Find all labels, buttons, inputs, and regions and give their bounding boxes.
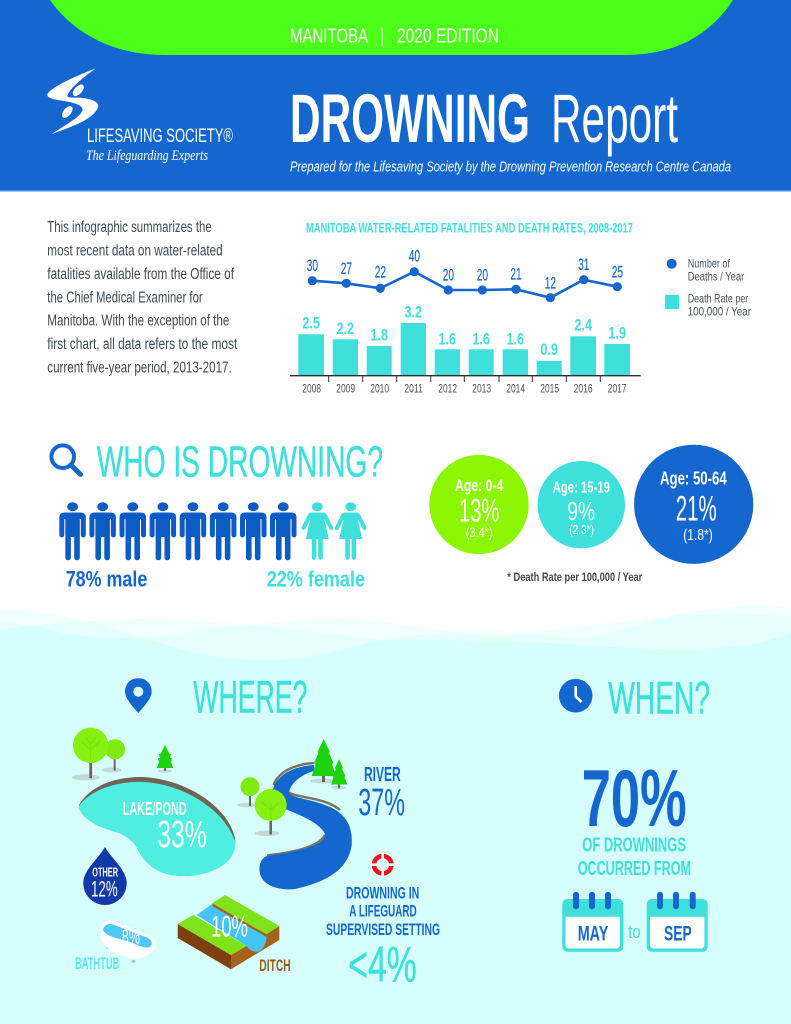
circle: age 0-4: 13% bbox=[459, 493, 499, 529]
caption: OF DROWNINGS bbox=[582, 835, 686, 857]
label: river 37%: RIVER bbox=[364, 764, 401, 786]
stat: 70%: 70% bbox=[582, 754, 687, 844]
bar value labels: 2.4 bbox=[574, 317, 593, 335]
calendar: May: MAY bbox=[578, 922, 608, 946]
circle: age 15-19: 9% bbox=[567, 496, 595, 526]
circle: age 50-64: 21% bbox=[676, 490, 717, 529]
bathtub: 8% bbox=[75, 920, 156, 973]
bar value labels: 2.2 bbox=[336, 320, 354, 338]
lake: 33%: 33% bbox=[157, 814, 207, 856]
background: water waves bbox=[0, 605, 791, 1024]
pictogram: 8 men bbox=[59, 502, 296, 560]
green edition tab bbox=[50, 0, 733, 55]
illustration: trees by the lake bbox=[72, 728, 173, 780]
title: Report bbox=[551, 80, 678, 157]
bar value labels: 1.6 bbox=[472, 330, 490, 348]
panel: header banner bbox=[0, 0, 791, 192]
pictogram: 2 women bbox=[302, 502, 366, 560]
calendar: May bbox=[562, 892, 623, 952]
label: lifeguard supervised setting: A LIFEGUARD bbox=[349, 903, 417, 921]
bar value labels: 1.6 bbox=[438, 330, 456, 348]
bar value labels: 3.2 bbox=[404, 304, 422, 322]
circle: age 15-19: Age: 15-19 bbox=[553, 480, 610, 497]
illustration: trees by the river bbox=[237, 739, 347, 836]
label: to: to bbox=[628, 922, 641, 942]
heading: WHERE? bbox=[193, 672, 307, 723]
label: male share: 78% male bbox=[66, 566, 147, 592]
x axis: 2011 bbox=[404, 384, 423, 396]
bar value labels: 1.8 bbox=[370, 327, 388, 345]
text block: introduction: first chart, all data refers to the most bbox=[47, 336, 238, 353]
drop: other 12%: OTHER bbox=[92, 866, 118, 880]
circle: age 50-64: (1.8*) bbox=[683, 527, 713, 544]
logo: Lifesaving Society: LIFESAVING SOCIETY® bbox=[87, 126, 233, 147]
bar series: death rate bbox=[298, 323, 630, 375]
title: DROWNING bbox=[290, 80, 530, 157]
legend: Deaths / Year bbox=[688, 270, 744, 284]
logo: Lifesaving Society bbox=[47, 68, 233, 164]
chart: fatalities and death rates bbox=[290, 220, 751, 396]
line value labels: 12 bbox=[545, 274, 556, 292]
circle: age 0-4: (3.4*) bbox=[466, 524, 493, 540]
icon: magnifying glass bbox=[51, 445, 80, 474]
drop: other 12% bbox=[83, 847, 127, 905]
icon: life ring bbox=[372, 854, 394, 876]
panel: where bbox=[72, 672, 440, 993]
x axis: 2015 bbox=[540, 384, 559, 396]
x axis: 2012 bbox=[438, 384, 457, 396]
text block: introduction: current five-year period, 2013-2017. bbox=[47, 359, 232, 376]
x axis: 2008 bbox=[302, 384, 321, 396]
calendar: September: SEP bbox=[664, 922, 692, 946]
heading: WHO IS DROWNING? bbox=[97, 438, 383, 487]
footnote: * Death Rate per 100,000 / Year bbox=[507, 572, 643, 584]
text block: introduction: This infographic summarizes the bbox=[47, 219, 212, 236]
circle: age 15-19: (2.3*) bbox=[569, 522, 594, 537]
x axis: 2017 bbox=[608, 384, 626, 396]
circle: age 50-64: Age: 50-64 bbox=[660, 468, 727, 488]
river: illustration bbox=[259, 763, 352, 889]
line value labels: 22 bbox=[375, 263, 386, 281]
bar value labels: 0.9 bbox=[540, 341, 558, 359]
x axis bbox=[290, 375, 641, 396]
lake: 33%: LAKE/POND bbox=[123, 799, 187, 819]
calendar: September bbox=[647, 892, 708, 952]
caption bbox=[578, 835, 691, 880]
x axis: 2016 bbox=[574, 384, 592, 396]
edition label bbox=[290, 25, 499, 47]
ditch: 10%: DITCH bbox=[259, 957, 291, 975]
x axis: 2013 bbox=[472, 384, 491, 396]
legend: Number of bbox=[688, 256, 730, 270]
text block: introduction: fatalities available from the Office of bbox=[47, 266, 235, 283]
heading: WHEN? bbox=[608, 672, 710, 723]
bathtub: 8%: BATHTUB bbox=[75, 955, 119, 973]
bar value labels: 1.9 bbox=[608, 324, 626, 342]
legend: 100,000 / Year bbox=[688, 305, 751, 319]
chart title: MANITOBA WATER-RELATED FATALITIES AND DEATH RATES, 2008-2017 bbox=[306, 220, 633, 236]
bathtub: 8%: 8% bbox=[122, 926, 140, 949]
line value labels: 20 bbox=[477, 267, 488, 285]
caption: OCCURRED FROM bbox=[578, 858, 691, 880]
legend bbox=[665, 256, 751, 319]
edition label: MANITOBA bbox=[290, 25, 368, 47]
legend: Death Rate per bbox=[688, 292, 748, 306]
label: river 37%: 37% bbox=[358, 782, 405, 824]
circle: age 0-4 bbox=[429, 455, 529, 554]
circle: age 0-4: Age: 0-4 bbox=[455, 477, 504, 495]
panel: when bbox=[559, 672, 710, 952]
drop: other 12%: 12% bbox=[91, 877, 118, 902]
panel: who is drowning bbox=[51, 438, 383, 592]
logo: Lifesaving Society: The Lifeguarding Experts bbox=[86, 148, 208, 164]
bar value labels bbox=[302, 304, 626, 359]
line value labels bbox=[307, 248, 623, 292]
text block: introduction bbox=[47, 219, 238, 376]
text block: introduction: Manitoba. With the exception of the bbox=[47, 313, 229, 330]
lake: 33% bbox=[79, 777, 235, 876]
panel: age groups bbox=[429, 445, 753, 584]
icon: location pin bbox=[125, 678, 152, 713]
x axis: 2014 bbox=[506, 384, 525, 396]
line value labels: 21 bbox=[510, 266, 522, 284]
icon: clock bbox=[559, 679, 592, 712]
line value labels: 27 bbox=[341, 260, 352, 278]
line value labels: 30 bbox=[307, 257, 318, 275]
bar value labels: 1.6 bbox=[506, 330, 524, 348]
label: lifeguard supervised setting: DROWNING IN bbox=[346, 884, 419, 902]
text block: introduction: the Chief Medical Examiner for bbox=[47, 290, 203, 307]
line value labels: 31 bbox=[578, 256, 589, 274]
label: lifeguard supervised setting: SUPERVISED SETTING bbox=[326, 921, 440, 939]
line value labels: 40 bbox=[409, 248, 420, 266]
stat: under 4%: <4% bbox=[348, 937, 417, 993]
edition label: 2020 EDITION bbox=[397, 25, 499, 47]
bar value labels: 2.5 bbox=[302, 315, 320, 333]
x axis: 2010 bbox=[370, 384, 389, 396]
label: river 37% bbox=[358, 764, 405, 824]
line value labels: 20 bbox=[443, 267, 454, 285]
label: female share: 22% female bbox=[267, 566, 365, 592]
circle: age 50-64 bbox=[634, 445, 753, 564]
x axis: 2009 bbox=[336, 384, 355, 396]
label: lifeguard supervised setting bbox=[326, 884, 440, 939]
circle: age 15-19 bbox=[538, 461, 625, 548]
line value labels: 25 bbox=[612, 263, 623, 281]
ditch: 10%: 10% bbox=[211, 911, 248, 944]
ditch: 10% bbox=[178, 895, 291, 975]
text block: introduction: most recent data on water-related bbox=[47, 243, 223, 260]
line series: number of deaths bbox=[308, 267, 622, 302]
